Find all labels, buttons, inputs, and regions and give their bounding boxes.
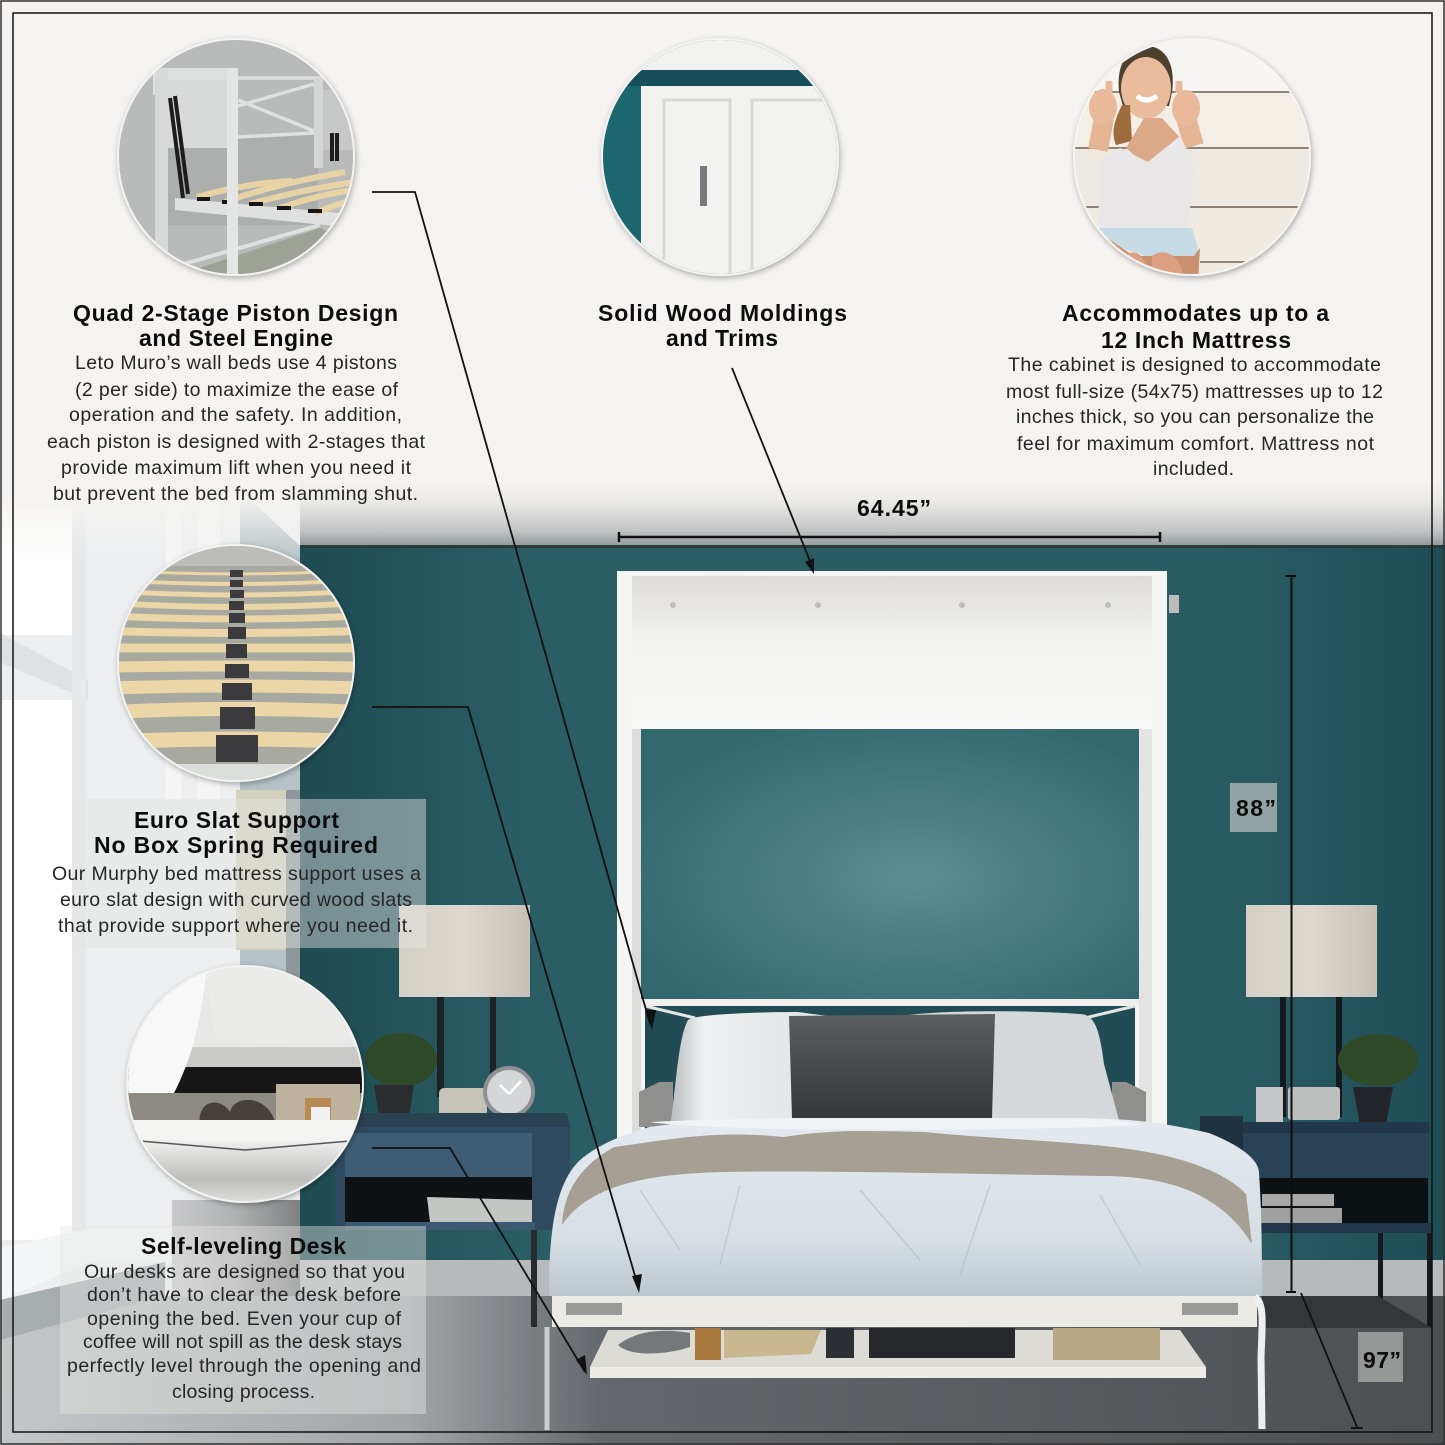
left nightstand and lamp: [335, 905, 570, 1327]
murphy bed cabinet: [617, 571, 1179, 1146]
text: mattress: inches thick, so you can personalize the: [1016, 406, 1374, 428]
lamp legs: [437, 997, 496, 1097]
photo circle: woman with mattress: [1070, 36, 1315, 284]
bed legs: [547, 1297, 1262, 1430]
lamp shade: [399, 905, 530, 997]
left bracket: [566, 1303, 622, 1315]
heading: desk: Self-leveling Desk: [141, 1233, 346, 1259]
translucent label: euro slat: [79, 799, 426, 948]
label box: 97: [1358, 1332, 1403, 1382]
arrow: moldings: [732, 368, 814, 574]
pot: [1353, 1087, 1393, 1125]
nightstand: [335, 1113, 570, 1327]
bed: [547, 1011, 1262, 1430]
heading: quad piston: Quad 2-Stage Piston Design: [73, 300, 398, 326]
heading: quad piston: and Steel Engine: [139, 325, 333, 351]
text: euro slat: [52, 863, 421, 937]
folded frame: [552, 1296, 1257, 1327]
text: desk: closing process.: [172, 1381, 315, 1403]
text: mattress: [1006, 354, 1383, 480]
box: [1288, 1087, 1340, 1120]
text: quad piston: each piston is designed with 2-stages that: [47, 431, 426, 453]
arrow: piston to frame: [372, 192, 656, 1030]
heading: moldings: Solid Wood Moldings: [598, 300, 847, 326]
arrow: desk: [372, 1148, 587, 1375]
text: desk: perfectly level through the opening and: [67, 1355, 421, 1377]
left pillow: [670, 1012, 838, 1128]
text: mattress: included.: [1153, 458, 1234, 480]
text: euro slat: Our Murphy bed mattress support uses a: [52, 863, 421, 885]
desk front: [590, 1367, 1206, 1378]
photo circle: desk under bed: [120, 960, 370, 1205]
throw blanket: [562, 1131, 1252, 1244]
lamp legs: [1280, 997, 1342, 1117]
dimension: depth 97: [1301, 1293, 1401, 1428]
text: desk: coffee will not spill as the desk stays: [83, 1331, 402, 1353]
text: quad piston: provide maximum lift when you need it: [61, 457, 412, 479]
text: euro slat: euro slat design with curved wood slats: [60, 889, 412, 911]
nightstand: [1200, 1116, 1433, 1328]
text: desk: don’t have to clear the desk before: [87, 1284, 401, 1306]
top sheet: [650, 1118, 1140, 1130]
items under bed: [590, 1328, 1206, 1367]
wrinkles: [640, 1185, 1140, 1275]
pot: [374, 1085, 414, 1123]
dimension: depth 97: 97”: [1363, 1347, 1401, 1373]
box: [439, 1088, 487, 1117]
dark pillow: [789, 1014, 995, 1118]
text: quad piston: [47, 352, 426, 505]
photo circle: piston mechanism: [114, 36, 360, 282]
right nightstand and lamp: [1200, 905, 1433, 1328]
lamp shade: [1246, 905, 1377, 997]
text: quad piston: operation and the safety. In addition,: [69, 404, 402, 426]
photo circle: moldings: [600, 36, 842, 290]
text: desk: opening the bed. Even your cup of: [87, 1308, 402, 1330]
text: euro slat: that provide support where you need it.: [58, 915, 413, 937]
heading: mattress: Accommodates up to a: [1062, 300, 1329, 326]
heading: mattress: 12 Inch Mattress: [1101, 327, 1291, 353]
heading: quad piston: [73, 300, 398, 351]
heading: moldings: [598, 300, 847, 351]
plant: [1338, 1034, 1418, 1086]
heading: euro slat: No Box Spring Required: [94, 832, 378, 858]
dimension: width: [619, 495, 1160, 542]
text: desk: [67, 1261, 421, 1403]
text: desk: Our desks are designed so that you: [84, 1261, 405, 1283]
clock: [485, 1068, 533, 1116]
dimension: height 88: 88”: [1236, 795, 1276, 821]
dimension: height 88: [1236, 576, 1296, 1292]
translucent label: self-leveling desk: [60, 1226, 426, 1414]
duvet: [549, 1118, 1262, 1296]
text: quad piston: Leto Muro’s wall beds use 4 pistons: [75, 352, 397, 374]
text: mattress: feel for maximum comfort. Mattress not: [1017, 433, 1375, 455]
photo circle: euro slats: [110, 540, 360, 784]
right pillow: [900, 1011, 1121, 1128]
heading: euro slat: Euro Slat Support: [134, 807, 339, 833]
headboard brackets: [639, 1082, 1146, 1127]
text: quad piston: but prevent the bed from slamming shut.: [53, 483, 418, 505]
text: mattress: The cabinet is designed to accommodate: [1008, 354, 1381, 376]
text: mattress: most full-size (54x75) mattresses up to 12: [1006, 381, 1383, 403]
arrow: slat: [372, 707, 642, 1293]
plant: [365, 1033, 437, 1087]
heading: mattress: [1062, 300, 1329, 353]
heading: euro slat: [94, 807, 378, 858]
dimension: width: 64.45”: [857, 495, 931, 521]
candle: [1256, 1087, 1283, 1122]
label box: 88: [1230, 783, 1277, 832]
heading: moldings: and Trims: [666, 325, 778, 351]
right bracket: [1182, 1303, 1238, 1315]
text: quad piston: (2 per side) to maximize the ease of: [75, 379, 399, 401]
